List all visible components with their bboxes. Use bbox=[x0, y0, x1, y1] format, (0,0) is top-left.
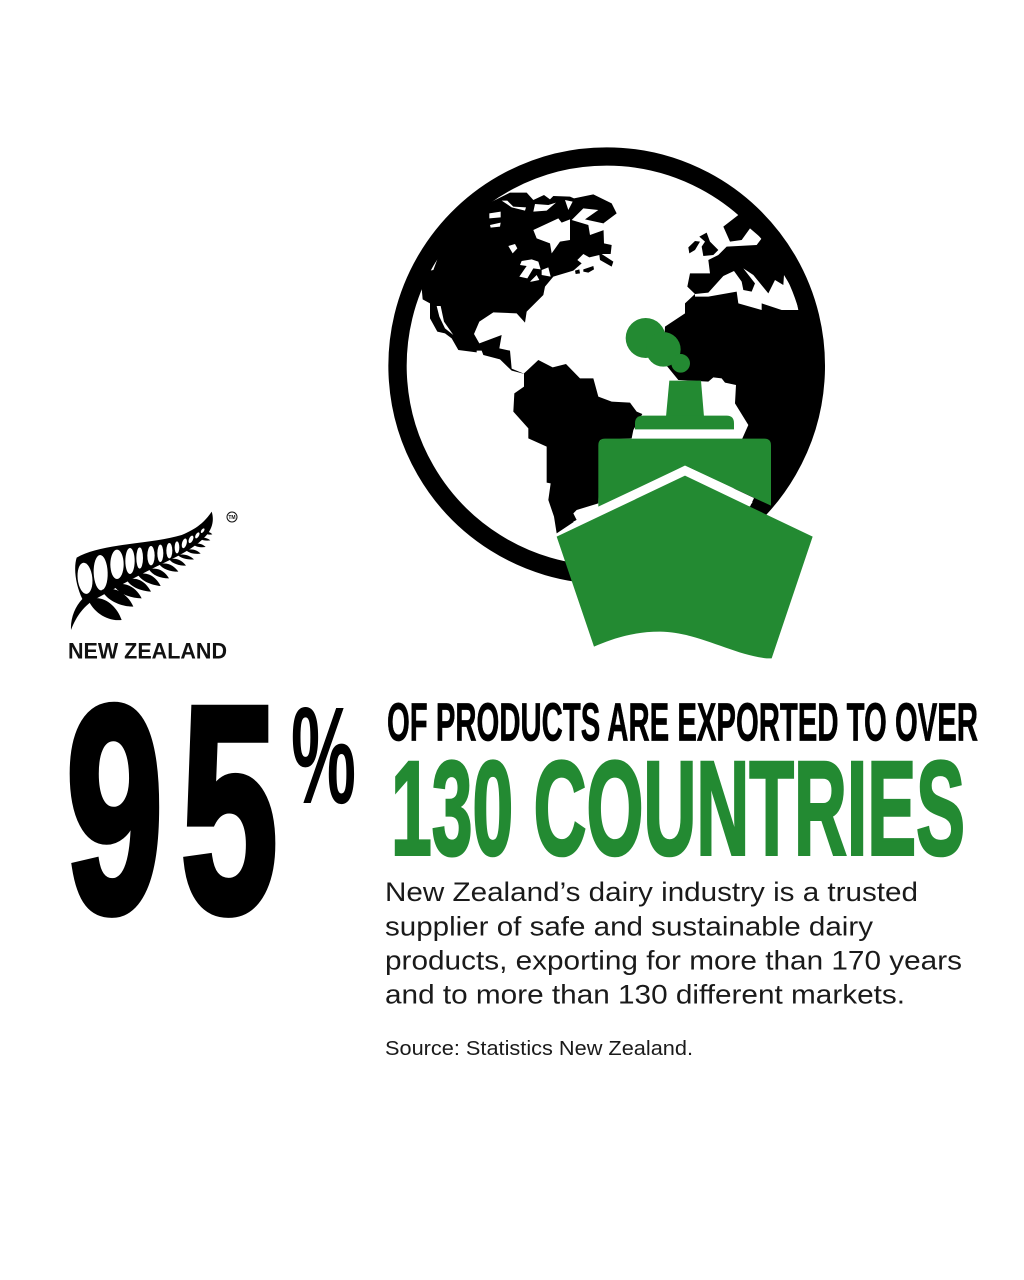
body paragraph: and to more than 130 different markets. bbox=[385, 980, 905, 1010]
body paragraph: products, exporting for more than 170 years bbox=[385, 946, 962, 976]
infographic canvas bbox=[69, 147, 978, 1055]
ship upper deck bbox=[635, 416, 734, 429]
icon: ship smoke bbox=[626, 318, 690, 373]
fern white ovals bbox=[76, 528, 205, 595]
ship bow stripe bbox=[573, 466, 754, 526]
trademark symbol: TM bbox=[228, 515, 236, 521]
trademark symbol bbox=[227, 512, 237, 522]
source note: Source: Statistics New Zealand. bbox=[385, 1038, 693, 1060]
fern lower leaflets bbox=[88, 532, 212, 620]
ship cabin bbox=[598, 439, 771, 507]
icon: cargo ship bbox=[557, 318, 813, 658]
body paragraph: supplier of safe and sustainable dairy bbox=[385, 912, 874, 942]
logo wordmark: NEW ZEALAND bbox=[68, 638, 227, 664]
body paragraph: New Zealand’s dairy industry is a trusted bbox=[385, 877, 918, 907]
icon: globe bbox=[387, 156, 847, 575]
percent sign: % bbox=[291, 679, 356, 833]
body paragraph bbox=[385, 877, 962, 1010]
fern upper frond bbox=[71, 512, 213, 630]
ship hull bbox=[557, 476, 813, 658]
ship funnel bbox=[666, 381, 704, 417]
logo: New Zealand fern bbox=[71, 512, 213, 630]
big number 95: 95 bbox=[66, 646, 295, 974]
